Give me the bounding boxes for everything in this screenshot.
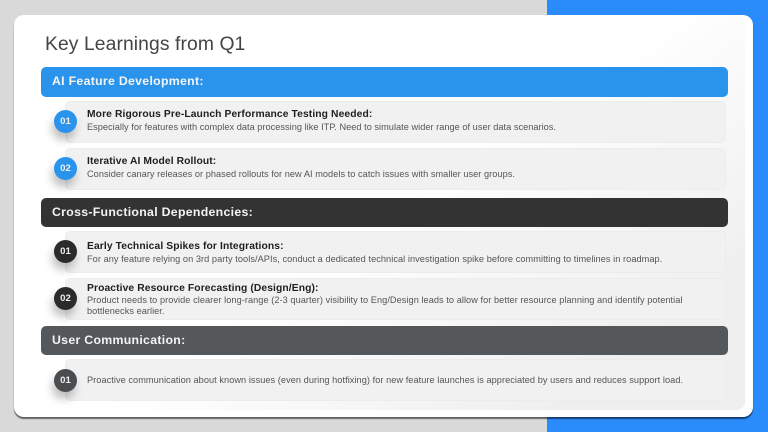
item heading: More Rigorous Pre-Launch Performance Testing Needed:	[87, 109, 372, 120]
number badge	[54, 110, 77, 133]
number badge	[54, 157, 77, 180]
item row: AI 02	[48, 148, 726, 191]
row background	[65, 101, 726, 143]
item heading: Iterative AI Model Rollout:	[87, 156, 216, 167]
number badge: 02	[60, 163, 71, 174]
item row: Cross 01	[48, 231, 665, 274]
item description: Consider canary releases or phased rollouts for new AI models to catch issues with smaller user groups.	[87, 169, 515, 179]
item description: Proactive communication about known issues (even during hotfixing) for new feature launches is appreciated by users and reduces support load.	[87, 374, 683, 384]
row background	[65, 231, 726, 273]
number badge: 02	[60, 293, 71, 304]
section header: Cross-Functional Dependencies	[41, 198, 728, 227]
title: Key Learnings from Q1	[45, 34, 245, 55]
item row: User 01	[48, 359, 683, 403]
item heading: Proactive Resource Forecasting (Design/Eng):	[87, 283, 319, 294]
item description: Product needs to provide clearer long-range (2-3 quarter) visibility to Eng/Design leads to allow for better resource planning and identify potential	[87, 295, 683, 305]
section header: Cross-Functional Dependencies: Cross-Functional Dependencies:	[52, 205, 253, 219]
number badge	[54, 287, 77, 310]
section header: AI Feature Development	[41, 67, 728, 97]
section header: AI Feature Development: AI Feature Development:	[52, 74, 204, 88]
number badge: 01	[60, 375, 71, 386]
number badge	[54, 369, 77, 392]
section header: User Communication: User Communication:	[52, 333, 185, 347]
number badge: 01	[60, 116, 71, 127]
item row: Cross 02	[48, 278, 683, 321]
number badge: 01	[60, 246, 71, 257]
row background	[65, 148, 726, 190]
item row: AI 01	[48, 101, 726, 144]
row background	[65, 278, 726, 320]
row background	[65, 359, 726, 401]
number badge	[54, 240, 77, 263]
item description: For any feature relying on 3rd party tools/APIs, conduct a dedicated technical investigation spike before committing to timelines in roadmap.	[87, 254, 662, 264]
section header: User Communication	[41, 326, 728, 355]
item description: Especially for features with complex data processing like ITP. Need to simulate wider range of user data scenarios.	[87, 122, 556, 132]
item description continuation: bottlenecks earlier.	[87, 306, 165, 316]
background: blue right panel	[547, 0, 768, 432]
item heading: Early Technical Spikes for Integrations:	[87, 240, 284, 252]
